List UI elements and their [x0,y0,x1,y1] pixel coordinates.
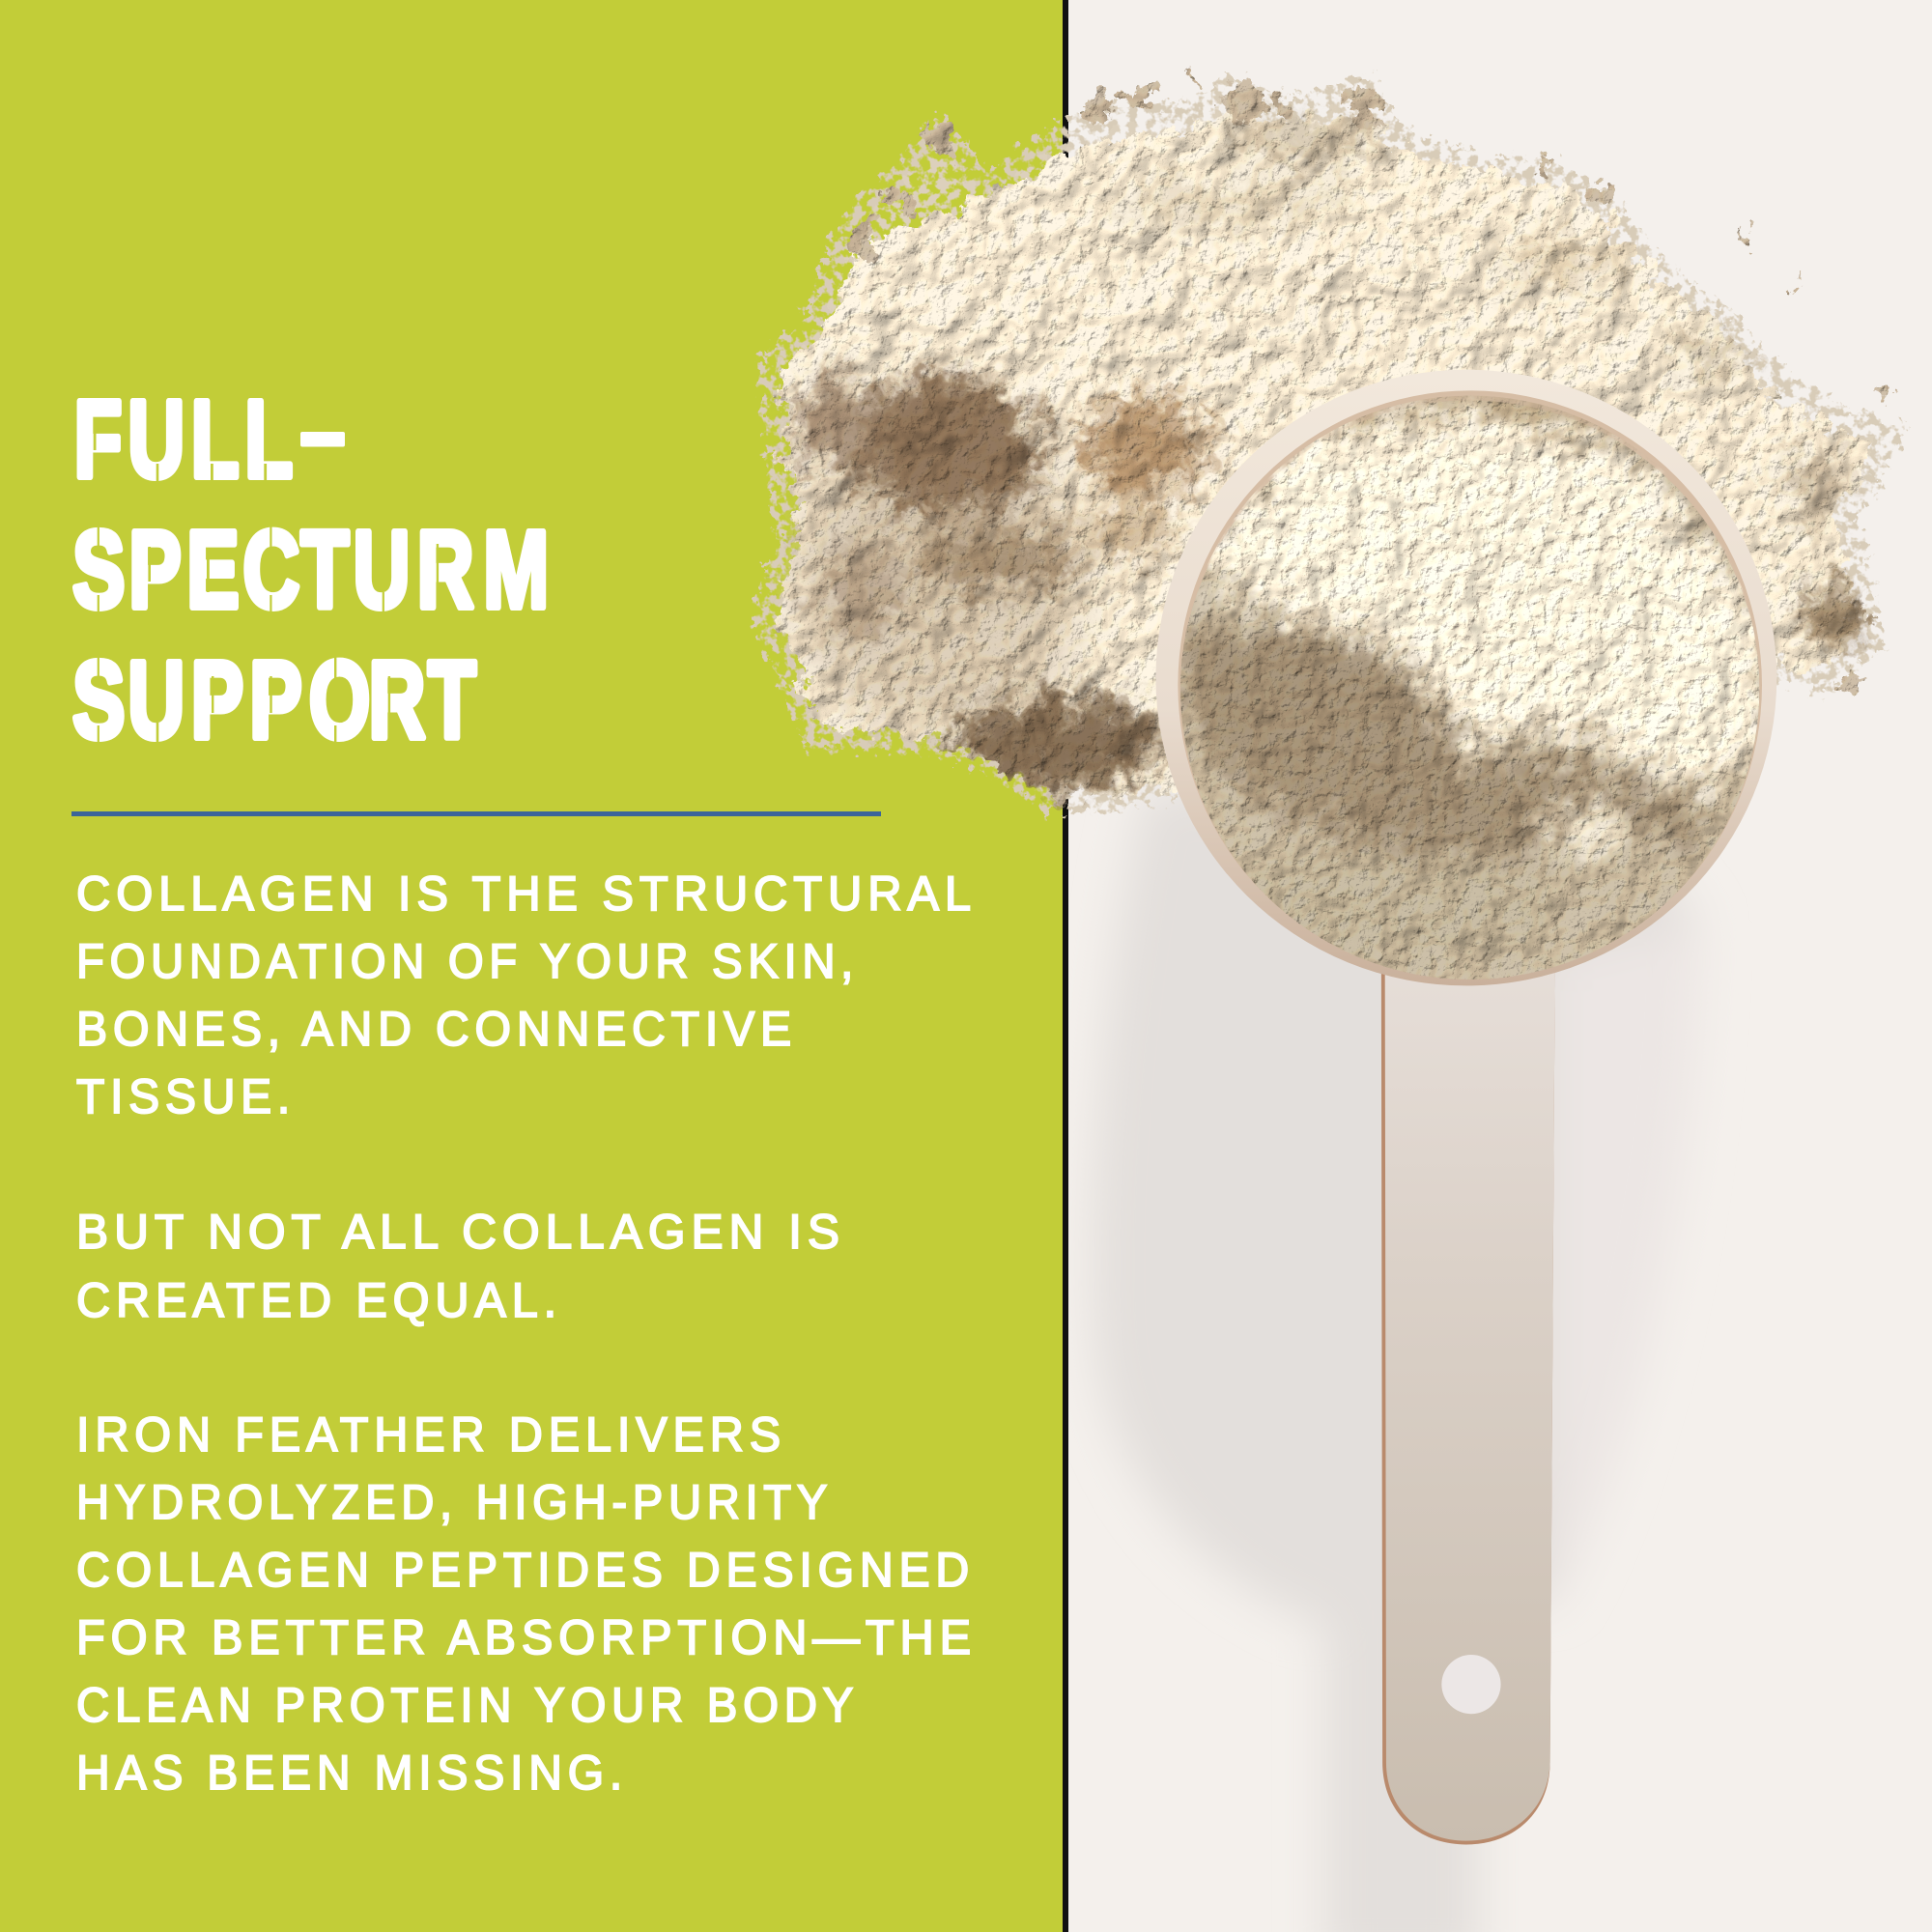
loose powder clumps [853,68,1890,685]
measuring scoop [1155,370,1776,1844]
heading: SPECTURM [72,509,549,631]
scoop inner shade [1178,390,1762,980]
heading: SUPPORT [72,639,476,761]
body text: paragraph 3: HAS BEEN MISSING. [76,1746,628,1800]
body text: paragraph 3: COLLAGEN PEPTIDES DESIGNED [76,1543,975,1597]
body text: paragraph 3: IRON FEATHER DELIVERS [76,1407,786,1462]
body text: paragraph 1: TISSUE. [76,1069,296,1123]
powder pile [764,68,1891,801]
body text: paragraph 2 [76,1205,845,1327]
body text: paragraph 3 [76,1407,977,1800]
scoop cast shadow [1092,788,1700,1932]
blue rule [71,811,881,816]
right photo background [1063,0,1932,1932]
body text: paragraph 1 [76,867,977,1123]
body text: paragraph 3: FOR BETTER ABSORPTION—THE [76,1610,977,1664]
body text: paragraph 1: FOUNDATION OF YOUR SKIN, [76,934,859,988]
left green panel [0,0,1063,1932]
body text: paragraph 3: CLEAN PROTEIN YOUR BODY [76,1678,859,1732]
powder in scoop [1177,387,1768,980]
body text: paragraph 2: CREATED EQUAL. [76,1273,562,1327]
powder mound [779,113,1873,795]
body text: paragraph 1: BONES, AND CONNECTIVE [76,1002,797,1056]
scoop handle [1381,961,1555,1844]
vertical black divider [1063,0,1068,1932]
body text: paragraph 3: HYDROLYZED, HIGH-PURITY [76,1475,833,1529]
heading: FULL [74,379,293,500]
heading [72,379,549,761]
heading: - [313,391,331,478]
scoop rim [1155,370,1776,985]
body text: paragraph 2: BUT NOT ALL COLLAGEN IS [76,1205,845,1259]
powder lacy fringe [764,89,1891,801]
body text: paragraph 1: COLLAGEN IS THE STRUCTURAL [76,867,977,921]
